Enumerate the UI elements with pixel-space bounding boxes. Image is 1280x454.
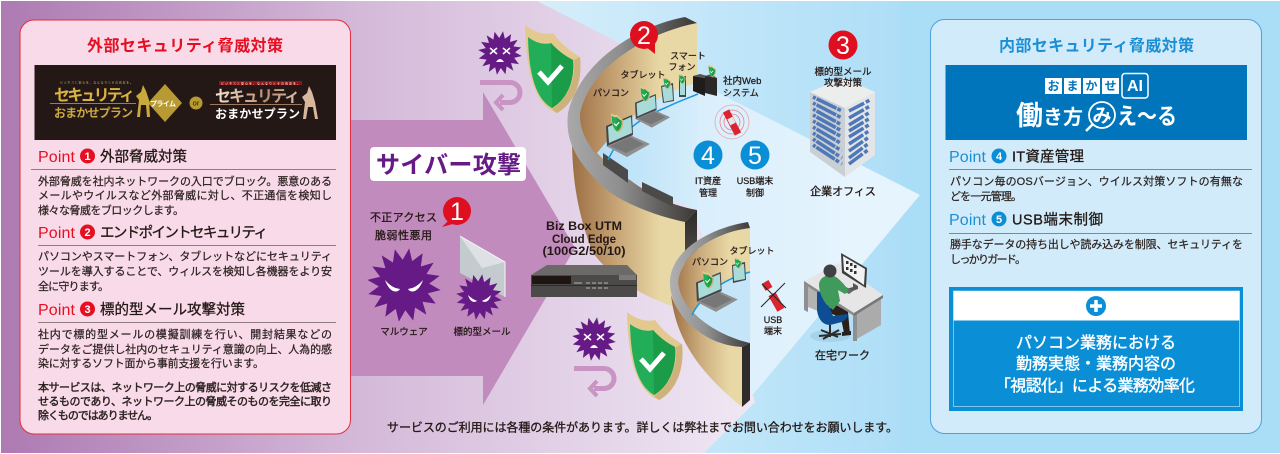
labels: office devices: 社内Web [723, 75, 761, 87]
network line: home [692, 272, 750, 315]
icon: home worker [804, 253, 883, 342]
disclaimer note: 本サービスは、ネットワーク上の脅威に対するリスクを低減さ [38, 380, 332, 394]
logo banner: security omakase plans: ビジネスと安心を、なんなりとその向友を。 [60, 80, 133, 84]
point 4: パソコン毎のOSバージョン、ウイルス対策ソフトの有無な [950, 174, 1243, 188]
label: Biz Box UTM [542, 221, 626, 258]
point 1 [31, 148, 336, 217]
callout 2: 2 [637, 22, 651, 50]
logo banner: omakase AI: せ [1104, 79, 1117, 93]
logo banner: security omakase plans: おまかせプラン [215, 107, 300, 121]
labels: office devices [593, 51, 761, 98]
logo banner: omakase AI: え〜る [1117, 103, 1177, 129]
logo banner: omakase AI [946, 65, 1247, 140]
badge 4 [694, 140, 722, 170]
icon: blocked usb [761, 282, 786, 310]
point 3 [38, 302, 336, 370]
label: USB control: 制御 [746, 187, 764, 198]
callout 3: 3 [836, 32, 850, 60]
point 1: 1 [84, 151, 91, 163]
callout 1: 1 [450, 198, 464, 226]
device: laptop [606, 113, 650, 157]
logo banner: security omakase plans: セキュリティ [215, 88, 300, 106]
point 4: 4 [996, 151, 1003, 163]
large wall: head office [567, 17, 697, 310]
top shield [525, 25, 580, 113]
label: Biz Box UTM: Biz Box UTM [546, 221, 622, 233]
label: corporate office: 企業オフィス [810, 184, 876, 198]
callout 1 [442, 197, 471, 227]
badge 5 [740, 140, 770, 170]
heading: internal security: 内部セキュリティ脅威対策 [999, 36, 1194, 55]
label: unauthorized access: 不正アクセス [370, 211, 437, 224]
small wall: home [670, 222, 750, 407]
bottom shield [627, 312, 682, 400]
plus box: visualization [949, 287, 1243, 411]
labels: office devices: スマート [670, 51, 706, 61]
labels: home devices: タブレット [729, 245, 775, 256]
label: targeted mail measures: 標的型メール [814, 66, 872, 78]
logo banner: omakase AI: か [1085, 79, 1098, 93]
label: malware: マルウェア [380, 327, 428, 338]
top blocked virus [475, 28, 525, 78]
icon: office building [810, 78, 875, 177]
logo banner: omakase AI: お [1047, 79, 1060, 93]
point 1: Point [38, 149, 76, 166]
logo banner: omakase AI: ま [1066, 79, 1079, 93]
label: targeted mail measures [814, 66, 872, 89]
point 5: Point [949, 212, 987, 229]
network line: head office [608, 94, 698, 160]
panel: external security [20, 20, 350, 434]
device: smartphone [679, 74, 686, 97]
label: IT assets: IT資産 [695, 175, 721, 186]
callout 2 [630, 21, 658, 54]
label: targeted mail: 標的型メール [453, 326, 511, 338]
device: Biz Box UTM [531, 265, 637, 297]
icon: unsafe usb signal [715, 105, 749, 139]
bottom blocked virus [569, 314, 619, 364]
logo banner: security omakase plans: ビジネスと安心を、なんなりとその向友を。 [221, 80, 300, 86]
point 4: どを一元管理。 [950, 189, 1022, 203]
label: IT assets [695, 175, 721, 198]
logo banner: omakase AI: き方 [1043, 106, 1083, 129]
device: laptop 2 [635, 86, 670, 128]
device: web servers [693, 65, 717, 96]
logo banner: omakase AI: 働 [1016, 101, 1043, 131]
device: home laptop [696, 271, 738, 312]
point 5: USB端末制御 [1012, 212, 1103, 228]
plus box: visualization: 勤務実態・業務内容の [1016, 355, 1176, 373]
point 3: Point [38, 302, 76, 319]
logo banner: omakase AI: み [1092, 106, 1112, 127]
disclaimer note [38, 380, 332, 422]
point 3: 標的型メール攻撃対策 [100, 302, 246, 318]
point 2: 全に守ります。 [38, 279, 109, 293]
point 4 [949, 148, 1252, 203]
point 4: Point [949, 149, 987, 166]
plus box: visualization: パソコン業務における [1016, 334, 1176, 352]
labels: office devices: フォン [668, 62, 696, 72]
point 4: IT資産管理 [1012, 148, 1084, 166]
icon: plus [1086, 296, 1106, 316]
label: usb device: 端末 [764, 325, 782, 336]
labels: home devices: パソコン [692, 257, 728, 267]
top return arrow [480, 82, 520, 110]
point 5: 勝手なデータの持ち出しや読み込みを制限、セキュリティを [950, 237, 1243, 251]
badge 4: 4 [701, 142, 715, 170]
logo banner: security omakase plans [34, 65, 336, 140]
icon: malware virus [362, 243, 446, 327]
label: cyber attack: サイバー攻撃 [376, 152, 521, 179]
logo banner: security omakase plans: プライム [150, 100, 176, 108]
point 1: 外部脅威対策 [100, 148, 188, 166]
callout 3 [828, 30, 858, 60]
labels: home devices [692, 245, 775, 267]
plus box: visualization: 「視認化」による業務効率化 [995, 377, 1195, 395]
label: unauthorized access [370, 211, 437, 242]
point 1: 外部脅威を社内ネットワークの入口でブロック。悪意のある [38, 174, 332, 188]
logo banner: security omakase plans: or [193, 98, 200, 108]
label: usb device: USB [764, 315, 782, 325]
point 3: データをご提供し社内のセキュリティ意識の向上、人為的感 [38, 342, 332, 356]
label: USB control [737, 175, 773, 198]
point 2 [38, 224, 336, 293]
icon: targeted mail [453, 236, 505, 323]
bottom return arrow [574, 368, 614, 396]
label: remote work: 在宅ワーク [815, 349, 870, 362]
logo banner: security omakase plans: おまかせプラン [54, 106, 133, 120]
label: unauthorized access: 脆弱性悪用 [375, 228, 432, 242]
labels: office devices: システム [723, 88, 759, 98]
label: Biz Box UTM: Cloud Edge [552, 234, 616, 246]
panel: internal security [930, 20, 1262, 434]
disclaimer note: 除くものではありません。 [38, 408, 158, 422]
label: Biz Box UTM: (100G2/50/10) [542, 246, 626, 258]
label: targeted mail measures: 攻撃対策 [824, 77, 862, 89]
point 2: ツールを導入することで、ウィルスを検知し各機器をより安 [38, 264, 332, 278]
label: usb device [764, 315, 782, 336]
label: USB control: USB端末 [737, 175, 773, 186]
point 2: Point [38, 225, 76, 242]
point 2: エンドポイントセキュリティ [100, 224, 268, 242]
point 3: 社内で標的型メールの模擬訓練を行い、開封結果などの [38, 327, 332, 341]
device: tablet [661, 77, 674, 103]
cyber attack arrow [200, 92, 575, 405]
point 5 [949, 212, 1252, 266]
point 1: メールやウイルスなど外部脅威に対し、不正通信を検知し [38, 188, 332, 202]
logo banner: security omakase plans: セキュリティ [54, 88, 135, 104]
point 5: 5 [996, 214, 1002, 226]
badge 5: 5 [748, 142, 762, 170]
point 5: しっかりガード。 [950, 253, 1026, 266]
point 3: 3 [84, 304, 91, 316]
point 2: パソコンやスマートフォン、タブレットなどにセキュリティ [38, 249, 332, 263]
footer note: サービスのご利用には各種の条件があります。詳しくは弊社までお問い合わせをお願いします。 [387, 420, 898, 434]
device: home tablet [732, 257, 746, 283]
heading: external security: 外部セキュリティ脅威対策 [87, 36, 283, 55]
point 3: 染に対するソフト面から事前支援を行います。 [38, 356, 264, 370]
point 1: 様々な脅威をブロックします。 [38, 203, 184, 217]
label: IT assets: 管理 [699, 187, 717, 198]
logo banner: omakase AI: AI [1127, 78, 1143, 95]
labels: office devices: パソコン [593, 88, 629, 98]
labels: office devices: タブレット [620, 69, 666, 80]
point 2: 2 [84, 227, 91, 239]
disclaimer note: せるものであり、ネットワーク上の脅威そのものを完全に取り [38, 394, 332, 408]
